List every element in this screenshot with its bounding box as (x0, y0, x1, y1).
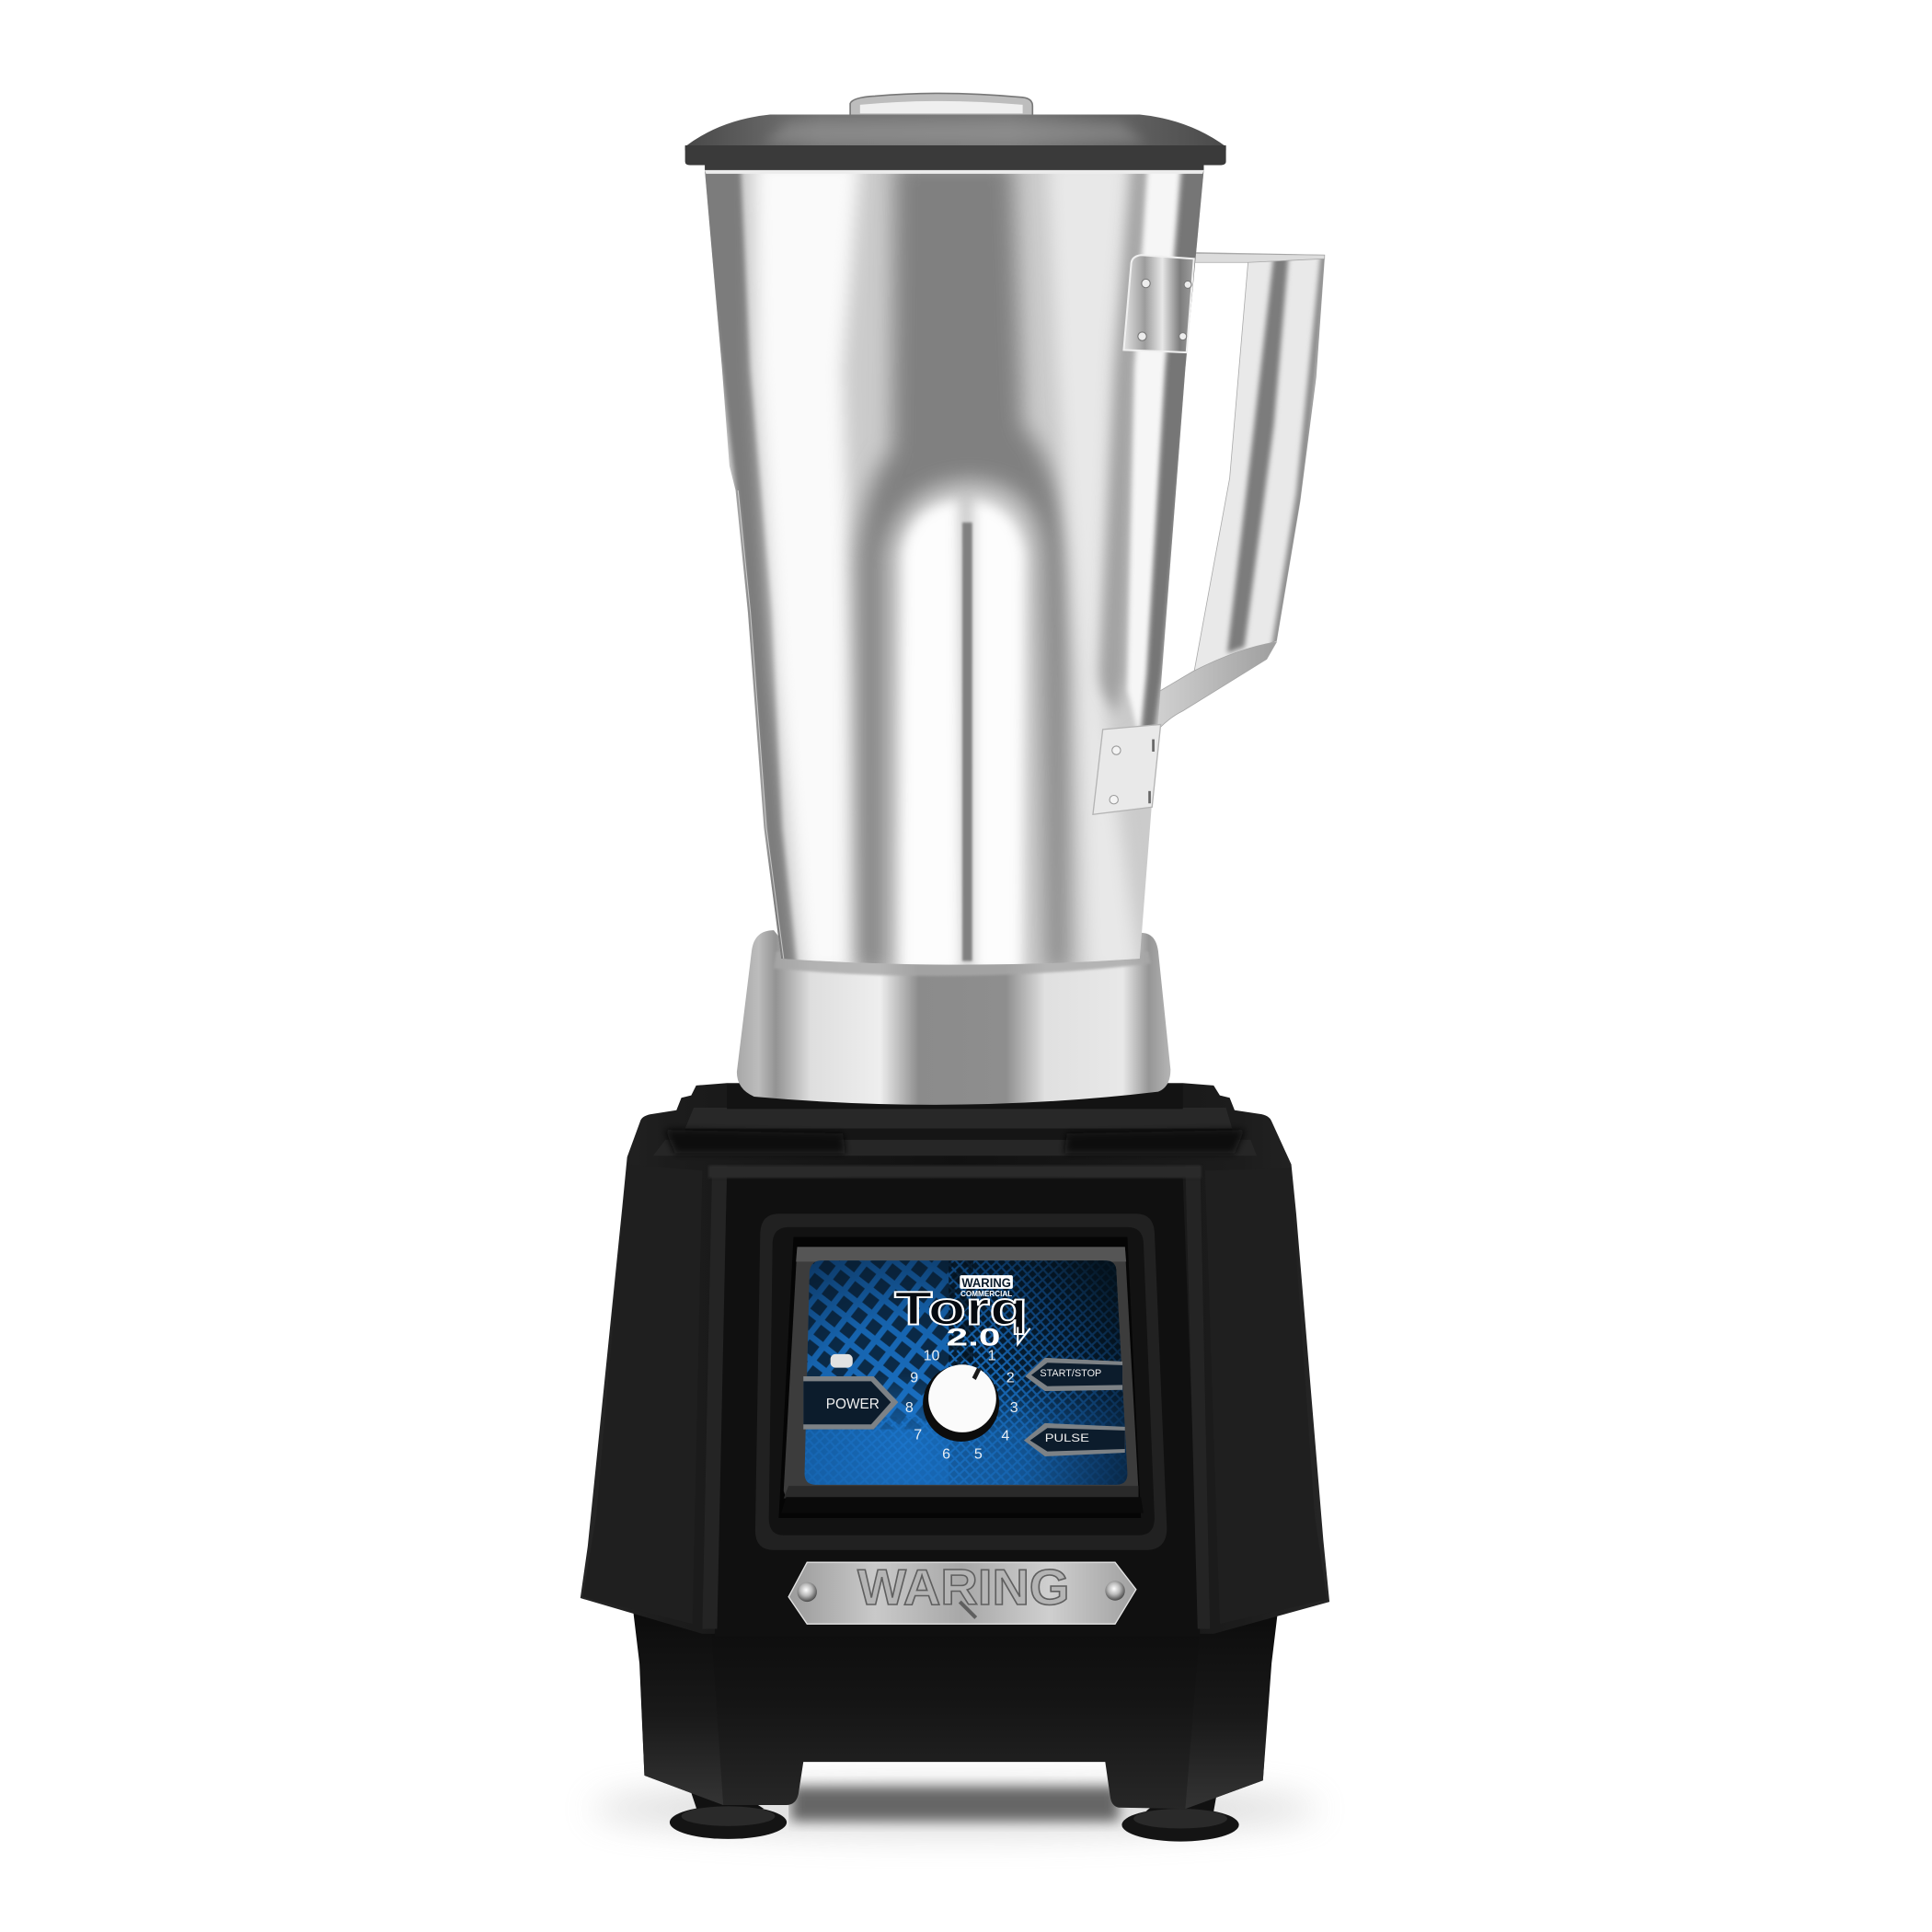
pulse tag (1024, 1423, 1125, 1456)
speed numbers: 7 (914, 1426, 922, 1443)
speed numbers: 6 (942, 1446, 950, 1463)
start/stop tag: START/STOP (1040, 1368, 1101, 1379)
jar edge highlight line (738, 490, 784, 959)
brand logo: WARING (961, 1275, 1011, 1290)
housing right facet (1205, 1168, 1327, 1624)
handle strap (1098, 642, 1277, 740)
blender (581, 1083, 1329, 1842)
notch shadow (791, 1787, 1119, 1821)
handle grip (1194, 252, 1325, 671)
jar bright strip beside handle (1127, 160, 1180, 740)
feet (670, 1775, 1239, 1842)
speed numbers: 8 (905, 1399, 914, 1416)
speed numbers: 4 (1001, 1428, 1009, 1444)
jar left dark edge (705, 170, 799, 960)
jar centre reflection (857, 160, 1067, 973)
brand logo: COMMERCIAL (960, 1289, 1013, 1298)
jar right dark edge (1139, 170, 1203, 726)
housing centre face (715, 1178, 1200, 1637)
speed dial knob (923, 1364, 999, 1442)
power tag: POWER (826, 1397, 880, 1412)
speed numbers: 9 (910, 1370, 918, 1386)
base lower body (632, 1602, 1279, 1809)
lower bracket (1093, 725, 1161, 814)
start/stop tag (1025, 1358, 1122, 1391)
lid knob (850, 93, 1032, 116)
power tag (803, 1376, 898, 1430)
jar arch highlight right (973, 500, 1025, 973)
right lower facet (1185, 1627, 1272, 1809)
left lower facet (638, 1627, 723, 1805)
speed numbers (905, 1348, 1018, 1463)
base upper housing (581, 1083, 1329, 1637)
jar arch highlight left (900, 500, 961, 973)
control panel bezel (755, 1213, 1167, 1550)
speed numbers: 3 (1010, 1399, 1018, 1416)
handle (1157, 252, 1325, 727)
lid rim (685, 145, 1226, 170)
panel sticker (803, 1260, 1128, 1485)
collar (737, 930, 1170, 1105)
jar strip beside handle (1100, 160, 1148, 715)
product logo: 2.0 (947, 1323, 1001, 1351)
waring nameplate (788, 1558, 1136, 1624)
housing left facet (582, 1165, 702, 1624)
product logo: Torq (894, 1282, 1028, 1335)
product logo (894, 1282, 1030, 1351)
jar right highlight (1047, 160, 1140, 973)
speed numbers: 10 (924, 1348, 939, 1364)
floor shadow (592, 1784, 1318, 1834)
handle brackets (1093, 255, 1194, 814)
jar left highlight (754, 160, 860, 973)
speed numbers: 2 (1006, 1370, 1015, 1386)
stainless jar (696, 160, 1213, 973)
lid dome (685, 115, 1226, 150)
lid (685, 93, 1226, 170)
upper bracket (1123, 255, 1194, 352)
brand logo (960, 1275, 1013, 1298)
housing top tiers (685, 1108, 1232, 1129)
pulse tag: PULSE (1045, 1432, 1089, 1444)
jar centre seam (962, 523, 972, 961)
speed numbers: 1 (988, 1348, 996, 1364)
speed numbers: 5 (974, 1446, 983, 1463)
LED (831, 1354, 853, 1368)
jar top rim (705, 170, 1203, 174)
waring nameplate: WARING (857, 1558, 1070, 1616)
